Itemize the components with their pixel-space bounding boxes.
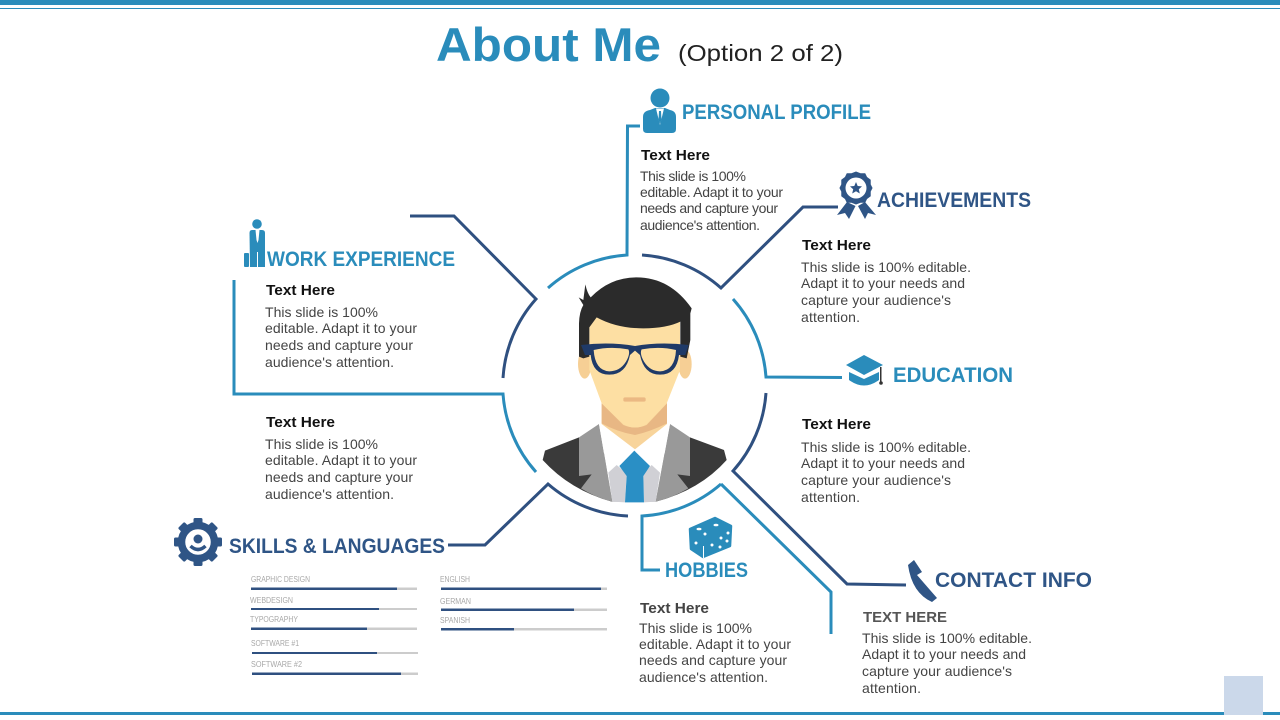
text block: achievements [801,238,971,325]
title: (Option 2 of 2) [678,40,843,66]
portrait: man in suit with glasses [543,277,727,502]
text block: contact info: capture your audience's [862,663,1012,679]
icon: gear with person [174,518,222,566]
text block: hobbies [639,601,791,685]
text block: achievements: Text Here [802,238,871,254]
text block: personal profile: This slide is 100% [640,168,746,184]
connector: left text block [234,280,536,472]
text block: left lower: This slide is 100% [265,436,378,452]
text block: achievements: attention. [801,309,860,325]
icon: graduation cap [846,355,883,386]
connector: personal profile [548,126,640,288]
skills bars: TYPOGRAPHY [250,615,299,624]
text block: contact info: attention. [862,680,921,696]
heading: education: EDUCATION [893,364,1013,387]
text block: work experience: audience's attention. [265,354,394,370]
text block: work experience [265,283,417,370]
text block: education: attention. [801,489,860,505]
skills bars: SOFTWARE #2 [251,660,303,669]
text block: left lower: Text Here [266,415,335,431]
text block: contact info: TEXT HERE [863,610,947,626]
skills bars: GRAPHIC DESIGN [251,575,310,584]
text block: hobbies: audience's attention. [639,669,768,685]
text block: work experience: needs and capture your [265,337,413,353]
language bars: GERMAN [440,597,471,606]
text block: work experience: Text Here [266,283,335,299]
connector: lower right teal [721,484,831,634]
text block: personal profile [640,148,783,233]
heading: personal profile: PERSONAL PROFILE [682,101,871,124]
text block: education: This slide is 100% editable. [801,439,971,455]
text block: personal profile: Text Here [641,148,710,164]
text block: contact info: This slide is 100% editable. [862,630,1032,646]
corner square [1224,676,1263,715]
text block: education [801,417,971,505]
text block: education: Text Here [802,417,871,433]
heading: skills and languages: SKILLS & LANGUAGES [229,535,445,558]
text block: achievements: This slide is 100% editable. [801,259,971,275]
text block: education: Adapt it to your needs and [801,455,965,471]
title [436,18,843,71]
text block: personal profile: needs and capture your [640,200,778,216]
connector: work experience [410,216,536,378]
heading: contact info: CONTACT INFO [935,569,1092,592]
connector: education [733,299,842,378]
heading: hobbies: HOBBIES [665,559,748,582]
icon: person with tie [643,88,676,133]
text block: hobbies: needs and capture your [639,652,787,668]
text block: left lower [265,415,417,502]
icon: award ribbon [837,171,876,219]
connector: achievements [642,207,838,288]
skills bars: SOFTWARE #1 [251,639,299,648]
language bars [440,575,607,630]
title: About Me [436,18,661,71]
icon: worker with suitcase [244,219,265,267]
language bars: SPANISH [440,616,470,625]
text block: work experience: This slide is 100% [265,304,378,320]
skills bars: WEBDESIGN [250,596,293,605]
connector: skills and languages [448,484,628,545]
language bars: ENGLISH [440,575,470,584]
text block: personal profile: editable. Adapt it to your [640,184,783,200]
text block: education: capture your audience's [801,472,951,488]
connector: hobbies [642,484,721,570]
text block: achievements: capture your audience's [801,292,951,308]
text block: achievements: Adapt it to your needs and [801,275,965,291]
text block: left lower: needs and capture your [265,469,413,485]
icon: phone [908,560,937,602]
heading: work experience: WORK EXPERIENCE [267,248,455,271]
text block: personal profile: audience's attention. [640,217,760,233]
skills bars [250,575,418,675]
text block: work experience: editable. Adapt it to your [265,320,417,336]
text block: contact info: Adapt it to your needs and [862,646,1026,662]
text block: hobbies: Text Here [640,601,709,617]
connector: contact info [733,393,906,585]
text block: hobbies: editable. Adapt it to your [639,636,791,652]
text block: contact info [862,610,1032,696]
text block: left lower: editable. Adapt it to your [265,452,417,468]
text block: left lower: audience's attention. [265,486,394,502]
heading: achievements: ACHIEVEMENTS [877,189,1031,212]
text block: hobbies: This slide is 100% [639,620,752,636]
icon: dice [690,518,731,558]
